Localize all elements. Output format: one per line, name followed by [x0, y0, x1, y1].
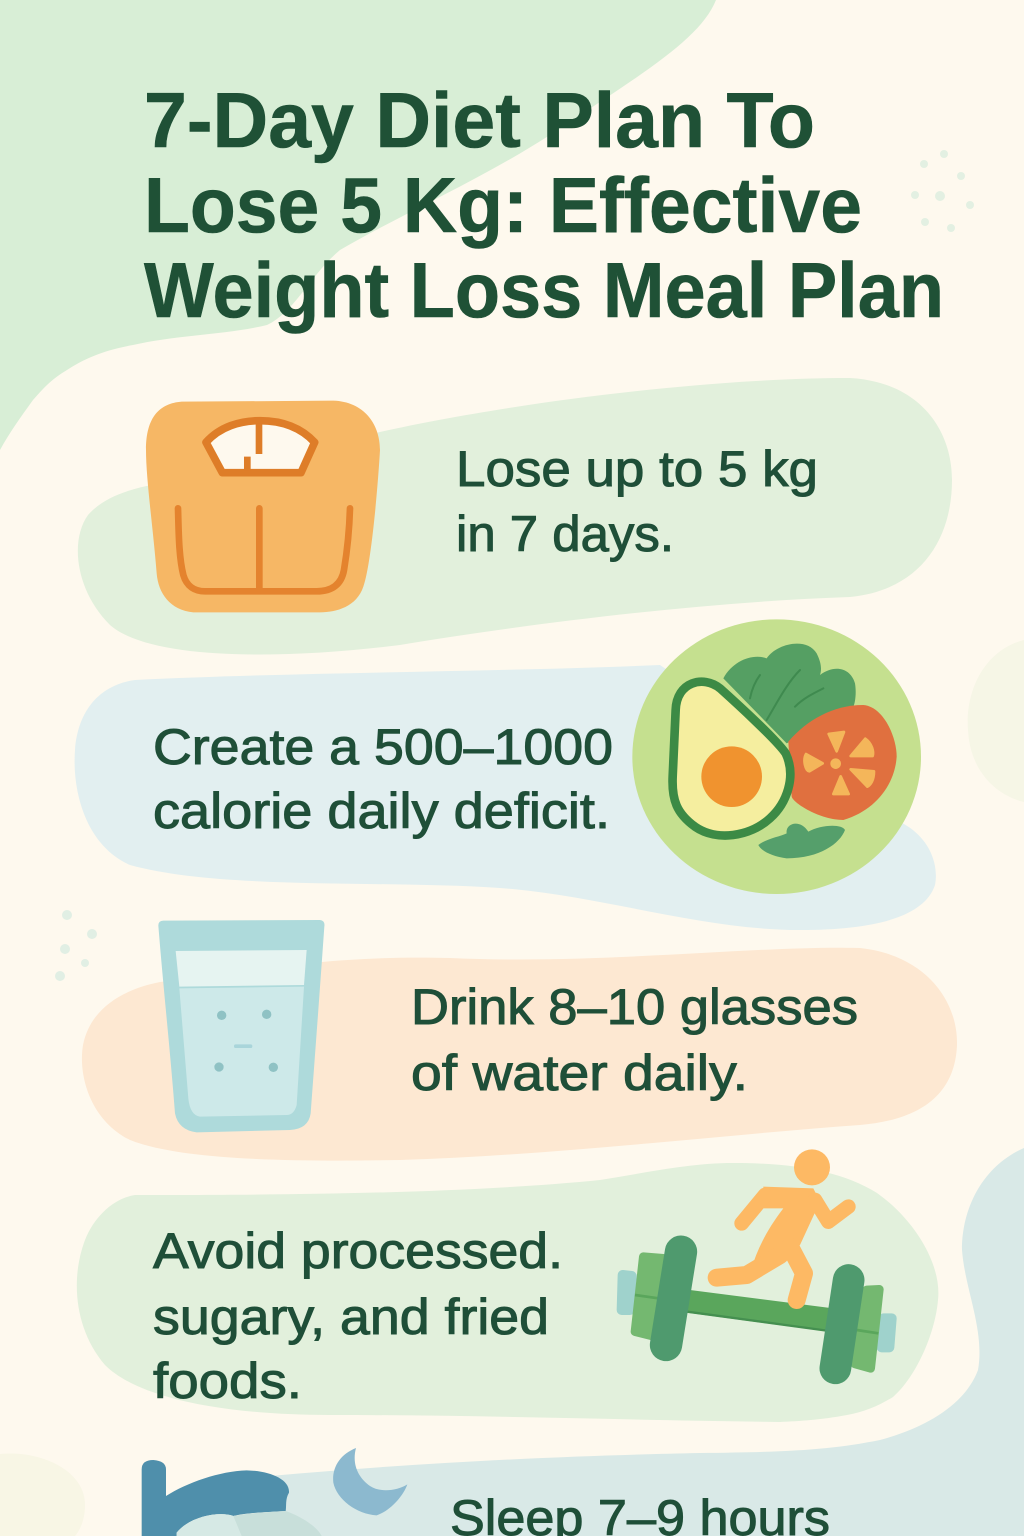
title: Weight Loss Meal Plan	[144, 246, 944, 334]
icon: runner on dumbbell	[622, 1149, 892, 1368]
text: lose up to 5 kg: Lose up to 5 kg	[456, 441, 818, 497]
panel background: green	[78, 378, 952, 655]
icon: salad plate	[632, 619, 921, 894]
decorative dots: left middle	[55, 910, 97, 981]
background blob: top left green	[0, 0, 716, 450]
title: Lose 5 Kg: Effective	[144, 161, 862, 249]
icon: weighing scale	[146, 401, 380, 612]
decorative dots: top right	[911, 150, 974, 232]
text: calorie deficit	[153, 719, 613, 839]
text: drink water: of water daily.	[411, 1045, 748, 1101]
panel background: peach	[82, 948, 957, 1161]
text: drink water	[411, 979, 858, 1101]
text: lose up to 5 kg: in 7 days.	[456, 506, 674, 562]
text: drink water: Drink 8–10 glasses	[411, 979, 858, 1035]
title: 7-Day Diet Plan To	[144, 76, 815, 164]
panel: sleep	[142, 1148, 1024, 1536]
text: calorie deficit: Create a 500–1000	[153, 719, 613, 775]
text: lose up to 5 kg	[456, 441, 818, 562]
background blob: right faint	[968, 640, 1024, 802]
icon: glass of water	[158, 920, 324, 1132]
title	[144, 76, 944, 334]
background blob: bottom left faint	[0, 1453, 85, 1536]
panel: drink water	[82, 920, 957, 1161]
text: avoid processed foods	[153, 1223, 563, 1409]
panel background: teal	[270, 1148, 1024, 1536]
panel background: green	[77, 1163, 938, 1422]
panel: calorie deficit	[75, 619, 936, 930]
text: avoid processed foods: Avoid processed.	[153, 1223, 563, 1279]
icon: bed and moon	[142, 1448, 407, 1536]
text: avoid processed foods: foods.	[153, 1353, 302, 1409]
text: avoid processed foods: sugary, and fried	[153, 1289, 549, 1345]
panel: avoid processed foods	[77, 1149, 938, 1422]
panel: lose weight	[78, 378, 952, 655]
panel background: blue	[75, 665, 936, 930]
text: calorie deficit: calorie daily deficit.	[153, 783, 610, 839]
